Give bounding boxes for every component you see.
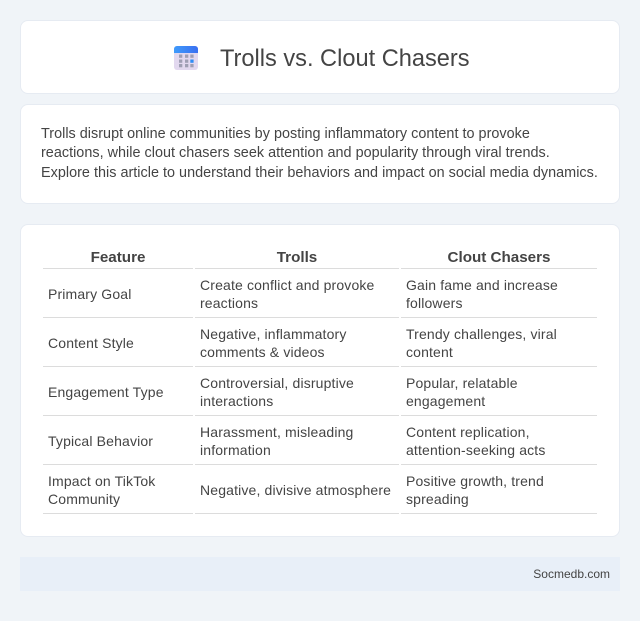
row: primary goal: Primary Goal — [48, 286, 131, 302]
row: typical behavior: Content replication, — [406, 424, 530, 440]
row: typical behavior: Harassment, misleading — [200, 424, 353, 440]
row: engagement type — [43, 375, 597, 416]
row: engagement type: Popular, relatable — [406, 375, 518, 391]
row: typical behavior: attention-seeking acts — [406, 442, 546, 458]
row: engagement type: interactions — [200, 393, 273, 409]
row: impact on TikTok community: Community — [48, 491, 120, 507]
row: content style: Negative, inflammatory — [200, 326, 346, 342]
row: primary goal: followers — [406, 295, 463, 311]
row: impact on TikTok community — [43, 473, 597, 514]
intro text: Explore this article to understand their behaviors and impact on social media dynamics. — [41, 164, 598, 180]
row: typical behavior — [43, 424, 597, 465]
footer bar — [20, 557, 620, 591]
row: content style: Content Style — [48, 335, 134, 351]
panel: comparison table — [20, 224, 620, 537]
row: typical behavior: Typical Behavior — [48, 433, 153, 449]
icon: calendar — [174, 46, 198, 70]
row: impact on TikTok community: Negative, divisive atmosphere — [200, 482, 391, 498]
row: impact on TikTok community: Positive growth, trend — [406, 473, 544, 489]
row: primary goal: Gain fame and increase — [406, 277, 558, 293]
table header: Clout Chasers — [448, 249, 550, 266]
table header — [43, 249, 597, 269]
row: content style: Trendy challenges, viral — [406, 326, 557, 342]
row: content style — [43, 326, 597, 367]
intro text: Trolls disrupt online communities by posting inflammatory content to provoke — [41, 126, 530, 142]
row: engagement type: Engagement Type — [48, 384, 164, 400]
table header: Trolls — [277, 249, 317, 266]
table header: Feature — [91, 249, 145, 266]
row: content style: content — [406, 344, 453, 360]
title: Trolls vs. Clout Chasers — [220, 46, 470, 72]
row: engagement type: Controversial, disruptive — [200, 375, 354, 391]
panel: introduction — [20, 104, 620, 204]
intro text: reactions, while clout chasers seek attention and popularity through viral trends. — [41, 145, 550, 161]
panel: title card — [20, 20, 620, 94]
row: impact on TikTok community: spreading — [406, 491, 469, 507]
row: content style: comments & videos — [200, 344, 325, 360]
intro text — [41, 126, 598, 180]
row: impact on TikTok community: Impact on TikTok — [48, 473, 155, 489]
row: primary goal: Create conflict and provoke — [200, 277, 374, 293]
row: primary goal — [43, 277, 597, 318]
footer text: Socmedb.com — [533, 567, 610, 581]
row: engagement type: engagement — [406, 393, 485, 409]
row: typical behavior: information — [200, 442, 271, 458]
row: primary goal: reactions — [200, 295, 258, 311]
